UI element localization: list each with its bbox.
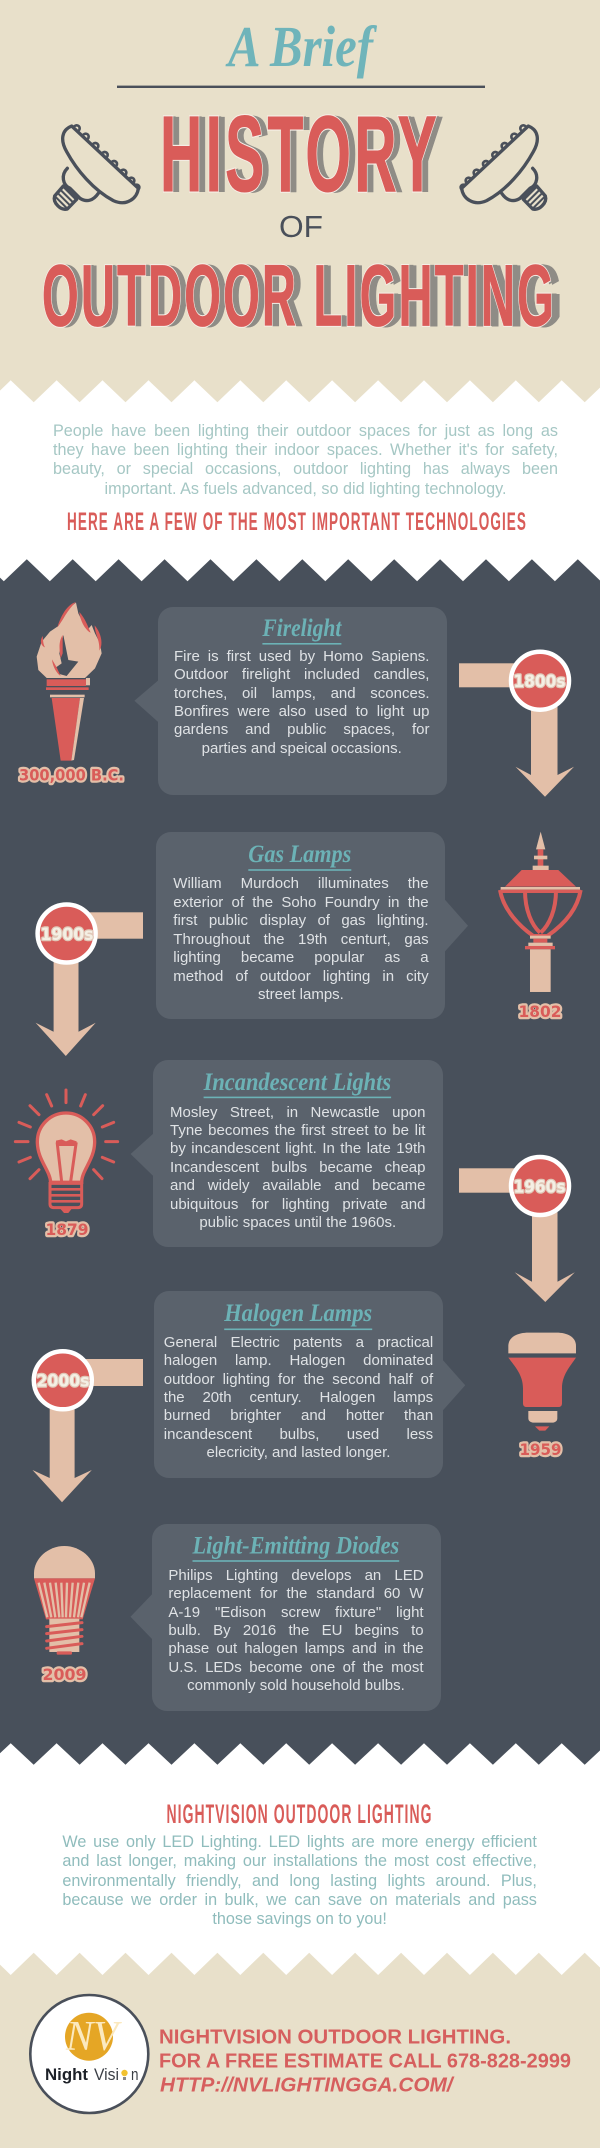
panel: Halogen Lamps: outdoor lighting for the second half of bbox=[164, 1371, 433, 1388]
panel: Gas Lamps: Gas Lamps bbox=[248, 841, 351, 868]
panel: Firelight: Outdoor firelight included candles, bbox=[174, 666, 429, 683]
label: 300,000 B.C.: 300,000 B.C. bbox=[19, 766, 124, 784]
icon: torch bbox=[37, 602, 102, 761]
logo: Night Vision bbox=[30, 1995, 148, 2113]
arrow: 1960s bbox=[459, 1157, 575, 1302]
intro paragraph: People have been lighting their outdoor spaces for just as long as bbox=[53, 422, 558, 440]
closing paragraph: environmentally friendly, and long lasting lights around. Plus, bbox=[62, 1872, 537, 1890]
panel: Firelight: Firelight bbox=[261, 615, 342, 642]
panel: Incandescent Lights: Incandescent Lights bbox=[203, 1069, 391, 1096]
panel: Incandescent Lights: public spaces until the 1960s. bbox=[199, 1214, 396, 1231]
panel: Gas Lamps bbox=[156, 832, 445, 1019]
title rule bbox=[117, 86, 485, 88]
icon: right ceiling lamp bbox=[461, 125, 546, 209]
logo: Night Vision: Night bbox=[45, 2066, 89, 2084]
panel: Light-Emitting Diodes: commonly sold household bulbs. bbox=[187, 1677, 405, 1694]
panel: Halogen Lamps: burned brighter and hotter than bbox=[164, 1407, 433, 1424]
title: History bbox=[160, 93, 446, 214]
contact details: NIGHTVISION OUTDOOR LIGHTING. bbox=[159, 2026, 511, 2048]
panel: Firelight: parties and speical occasions. bbox=[202, 740, 402, 757]
arrow: 1900s: 1900s bbox=[40, 925, 94, 945]
label: 1959: 1959 bbox=[520, 1440, 562, 1459]
logo: Night Vision: NV bbox=[65, 2014, 122, 2060]
panel: Gas Lamps: street lamps. bbox=[258, 986, 344, 1003]
intro paragraph bbox=[53, 422, 558, 498]
header background bbox=[0, 0, 600, 402]
panel: Gas Lamps: William Murdoch illuminates the bbox=[173, 875, 429, 892]
arrow: 2000s bbox=[32, 1351, 143, 1502]
panel: Light-Emitting Diodes: bulb. By 2016 the EU begins to bbox=[168, 1622, 424, 1639]
arrow: 1800s: 1800s bbox=[514, 672, 566, 692]
panel: Firelight: torches, oil lamps, and sconces. bbox=[174, 685, 429, 702]
panel: Halogen Lamps bbox=[154, 1291, 443, 1478]
intro paragraph: they have been lighting their indoor spaces. Whether it's for safety, bbox=[53, 441, 558, 459]
panel: Firelight: Bonfires were also used to light up bbox=[174, 703, 429, 720]
intro paragraph: beauty, or special occasions, outdoor lighting has always been bbox=[53, 460, 558, 478]
closing paragraph: and last longer, making our installations the most cost effective, bbox=[62, 1852, 537, 1870]
label: 1802: 1802 bbox=[518, 1002, 562, 1021]
panel: Light-Emitting Diodes: Light-Emitting Diodes bbox=[191, 1532, 399, 1560]
arrow: 1800s bbox=[459, 652, 574, 797]
panel: Light-Emitting Diodes: phase out halogen lamps and in the bbox=[168, 1640, 424, 1657]
panel: Gas Lamps: Throughout the 19th centurt, gas bbox=[173, 931, 429, 948]
contact details bbox=[159, 2026, 571, 2096]
arrow: 1900s bbox=[36, 904, 143, 1056]
intro paragraph: important. As fuels advanced, so did lighting technology. bbox=[105, 480, 506, 498]
panel: Halogen Lamps: General Electric patents a practical bbox=[164, 1334, 433, 1351]
icon: reflector bulb bbox=[508, 1333, 576, 1431]
panel: Light-Emitting Diodes bbox=[152, 1524, 441, 1711]
panel: Halogen Lamps: the 20th century. Halogen lamps bbox=[164, 1389, 433, 1406]
icon: left ceiling lamp bbox=[54, 125, 139, 209]
panel: Firelight: Fire is first used by Homo Sapiens. bbox=[174, 648, 429, 665]
panel: Incandescent Lights bbox=[153, 1060, 443, 1247]
panel: Halogen Lamps: halogen lamp. Halogen dominated bbox=[164, 1352, 433, 1369]
panel: Light-Emitting Diodes: Philips Lighting develops an LED bbox=[168, 1567, 424, 1584]
panel: Gas Lamps: first public display of gas lighting. bbox=[173, 912, 429, 929]
contact details: HTTP://NVLIGHTINGGA.COM/ bbox=[160, 2074, 455, 2096]
panel: Incandescent Lights: and widely available and became bbox=[170, 1177, 425, 1194]
panel: Gas Lamps: method of outdoor lighting in city bbox=[173, 968, 429, 985]
panel: Incandescent Lights: Tyne becomes the first street to be lit bbox=[170, 1122, 425, 1139]
panel: Gas Lamps: exterior of the Soho Foundry in the bbox=[173, 894, 429, 911]
panel: Incandescent Lights: ubiquitous for lighting private and bbox=[170, 1196, 425, 1213]
panel: Light-Emitting Diodes: replacement for the standard 60 W bbox=[168, 1585, 424, 1602]
arrow: 2000s: 2000s bbox=[36, 1372, 90, 1392]
title: A Brief: A Brief bbox=[225, 14, 378, 79]
closing paragraph: those savings on to you! bbox=[212, 1910, 387, 1928]
closing paragraph: We use only LED Lighting. LED lights are more energy efficient bbox=[62, 1833, 537, 1851]
panel: Light-Emitting Diodes: A-19 "Edison screw fixture" light bbox=[168, 1604, 424, 1621]
panel: Firelight bbox=[158, 607, 447, 795]
icon: LED bulb bbox=[34, 1546, 95, 1655]
timeline dark background bbox=[0, 559, 600, 1765]
icon: gas street lamp bbox=[500, 832, 581, 992]
closing paragraph bbox=[62, 1833, 537, 1928]
icon: incandescent bulb bbox=[15, 1090, 118, 1213]
arrow: 1960s: 1960s bbox=[514, 1178, 566, 1198]
panel: Halogen Lamps: elecricity, and lasted longer. bbox=[206, 1444, 390, 1461]
label: 2009: 2009 bbox=[42, 1665, 86, 1684]
panel: Incandescent Lights: Incandescent bulbs became cheap bbox=[170, 1159, 425, 1176]
panel: Gas Lamps: lighting became popular as a bbox=[173, 949, 429, 966]
footer background bbox=[0, 1953, 600, 2148]
panel: Halogen Lamps: Halogen Lamps bbox=[223, 1300, 372, 1327]
panel: Halogen Lamps: incandescent bulbs, used less bbox=[164, 1426, 433, 1443]
title: of: OF bbox=[279, 210, 323, 244]
closing paragraph: because we order in bulk, we can save on materials and pass bbox=[62, 1891, 537, 1909]
panel: Firelight: gardens and public spaces, for bbox=[174, 721, 429, 738]
logo: Night Vision: n bbox=[131, 2066, 138, 2084]
label: 1879: 1879 bbox=[46, 1220, 88, 1239]
panel: Incandescent Lights: Mosley Street, in Newcastle upon bbox=[170, 1104, 425, 1120]
panel: Incandescent Lights: by incandescent light. In the late 19th bbox=[170, 1140, 425, 1157]
logo: Night Vision: Visi bbox=[94, 2066, 119, 2084]
panel: Light-Emitting Diodes: U.S. LEDs become one of the most bbox=[168, 1659, 424, 1676]
contact details: FOR A FREE ESTIMATE CALL 678-828-2999 bbox=[159, 2050, 571, 2072]
